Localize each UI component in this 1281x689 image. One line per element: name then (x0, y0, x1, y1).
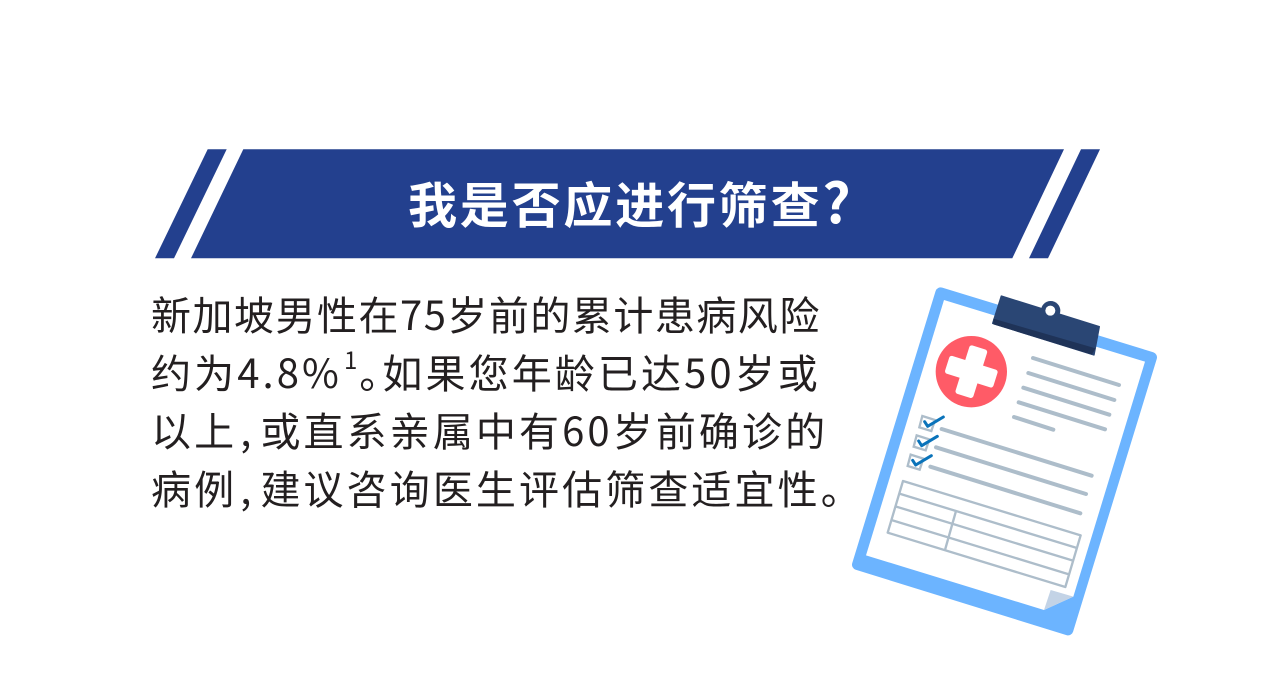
title: 我是否应进行筛查? (408, 159, 853, 239)
checkboxes (908, 416, 943, 470)
text lines (930, 358, 1119, 513)
medical cross badge (936, 336, 1007, 407)
body text: 约为4.8%1。如果您年龄已达50岁或 (151, 341, 821, 400)
body text: 新加坡男性在75岁前的累计患病风险 (151, 284, 821, 342)
clip (993, 296, 1099, 355)
clipboard board (857, 293, 1152, 630)
body text: 病例,建议咨询医生评估筛查适宜性。 (151, 458, 864, 516)
paper sheet (866, 300, 1145, 610)
page fold (1044, 590, 1073, 610)
body text: 以上,或直系亲属中有60岁前确诊的 (151, 400, 828, 458)
body text (151, 284, 864, 516)
icon: medical clipboard (852, 287, 1157, 636)
table form (888, 481, 1081, 587)
